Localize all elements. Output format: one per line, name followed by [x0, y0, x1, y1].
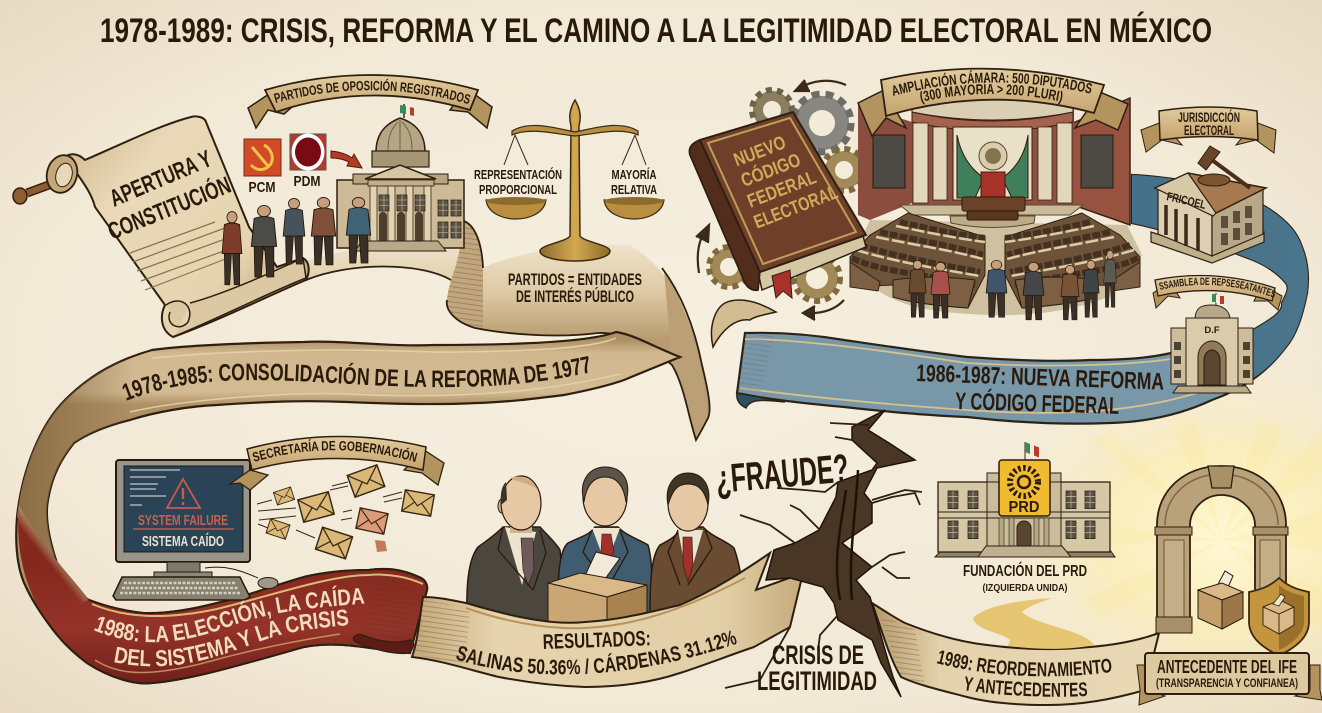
banner: assembly of representatives: [1152, 274, 1283, 311]
icon: PRD founding building: [935, 442, 1115, 557]
book title: NUEVO: [731, 132, 789, 171]
arrow: parties toward congress: [331, 151, 362, 168]
icon: PDM party emblem: [290, 134, 326, 190]
arrows: reform cycle: [696, 80, 846, 320]
scale labels: RELATIVA: [611, 182, 657, 197]
deputies standing: [909, 250, 1116, 320]
ribbon text: 1986-1987: [916, 360, 1165, 420]
ribbon text: 1986-1987: 1986-1987: NUEVA REFORMA: [916, 360, 1165, 396]
icon: gold shield: [1249, 578, 1309, 656]
results text: RESULTADOS:: [542, 627, 651, 654]
ribbon red section: [18, 505, 428, 684]
icon: PCM party emblem: PCM: [248, 179, 276, 196]
ribbon text: 1978-1985: 1978-1985: CONSOLIDACIÓN DE LA REFORMA DE 1977: [122, 356, 588, 400]
text: fraud question: ¿FRAUDE?: [714, 447, 850, 502]
candidate right: [650, 473, 742, 625]
ribbon text: 1989: Y ANTECEDENTES: [965, 676, 1088, 697]
banner: electoral jurisdiction: JURISDICCIÓN: [1178, 110, 1240, 125]
icon: crashed computer: SYSTEM FAILURE: [138, 513, 228, 529]
book title: FEDERAL: [745, 167, 820, 213]
candidate left: [467, 476, 562, 630]
background glow behind the arch: [955, 340, 1322, 713]
icon: scales of justice: [474, 100, 664, 261]
ribbon: 1986-1987 blue band: [737, 175, 1308, 424]
path to the arch: [973, 598, 1094, 649]
ribbon: 1989 reorganisation: [872, 602, 1160, 706]
banner: registered opposition parties: [247, 74, 493, 130]
ribbon text: 1988 election: DEL SISTEMA Y LA CRISIS: [114, 610, 348, 666]
chamber floor: [850, 220, 1142, 315]
gears around code book: [709, 90, 865, 301]
icon: ballot box at arch: [1198, 571, 1243, 629]
ribbon text: 1988 election: 1988: LA ELECCIÓN, LA CAÍDA: [94, 586, 364, 642]
scale labels: PROPORCIONAL: [479, 182, 557, 197]
deputy seats: [850, 213, 1140, 308]
text: legitimacy crisis: LEGITIMIDAD: [757, 666, 877, 696]
icon: D.F. assembly building: [1171, 293, 1253, 393]
national flags and seal: [957, 135, 1028, 198]
scale labels: [474, 167, 657, 197]
note: parties as public-interest entities: [508, 270, 642, 306]
icon: new federal electoral code book: [689, 112, 866, 298]
scroll rod and roll: [13, 152, 81, 204]
ribbon: upper tan band with parties note: [300, 221, 710, 440]
results text: SALINAS 50.36% / CÁRDENAS 31.12%: [456, 630, 737, 675]
scale labels: MAYORÍA: [612, 167, 657, 182]
chamber of deputies hall: [850, 98, 1142, 320]
ribbon text: 1989: [936, 650, 1112, 697]
icon: arch of legitimacy: [1155, 466, 1288, 633]
icon: PCM party emblem: [244, 139, 281, 196]
icon: electoral tribunal with gavel: FRICOEL: [1165, 189, 1207, 212]
legitimacy crack: [725, 410, 922, 697]
icon: PDM party emblem: PDM: [294, 173, 320, 190]
banner: electoral jurisdiction: ELECTORAL: [1184, 123, 1234, 138]
plaque: IFE antecedent: [1137, 653, 1322, 705]
label: PRD foundation: [963, 561, 1087, 594]
banner: chamber expansion: (300 MAYORÍA > 200 PLURI): [920, 81, 1062, 104]
icon: crashed computer: [113, 460, 278, 600]
flying envelopes: [257, 465, 434, 559]
PRD sign: PRD: [1008, 499, 1040, 516]
banner: assembly of representatives: SSAMBLEA DE REPSESEATANTES: [1159, 278, 1276, 298]
label: PRD foundation: FUNDACIÓN DEL PRD: [963, 561, 1087, 580]
banner: chamber expansion: [857, 68, 1129, 138]
scale labels: REPRESENTACIÓN: [474, 167, 562, 182]
ballot box: [548, 552, 647, 625]
book title: [731, 132, 841, 233]
label: PRD foundation: (IZQUIERDA UNIDA): [982, 582, 1068, 594]
scroll heading: [104, 145, 235, 246]
icon: crashed computer: SISTEMA CAÍDO: [142, 533, 224, 550]
text: legitimacy crisis: CRISIS DE: [772, 640, 864, 670]
book title: ELECTORAL: [751, 182, 841, 233]
scroll heading: APERTURA Y: [106, 145, 216, 213]
banner: registered opposition parties: PARTIDOS DE OPOSICIÓN REGISTRADOS: [274, 78, 470, 104]
banner: chamber expansion: AMPLIACIÓN CÁMARA: 500 DIPUTADOS: [893, 70, 1092, 96]
note: parties as public-interest entities: DE INTERÉS PÚBLICO: [516, 287, 634, 306]
scroll heading: CONSTITUCIÓN: [104, 171, 235, 246]
banner: secretaría de gobernación: SECRETARÍA DE GOBERNACIÓN: [252, 439, 418, 462]
people filing to register: [222, 197, 371, 285]
text: legitimacy crisis: [757, 640, 877, 696]
three candidates with ballot box: [467, 467, 742, 630]
icon: constitution scroll: [13, 116, 309, 337]
ribbon text: 1986-1987: Y CÓDIGO FEDERAL: [955, 387, 1120, 420]
fold of red ribbon: [353, 634, 414, 653]
banner: electoral jurisdiction: [1141, 107, 1276, 153]
candidate center: [558, 467, 652, 625]
icon: electoral tribunal with gavel: [1151, 146, 1266, 263]
ribbon curl: blue band tip: [711, 300, 776, 347]
book title: CÓDIGO: [738, 149, 804, 192]
ribbon text: 1989: 1989: REORDENAMIENTO: [936, 650, 1112, 676]
ribbon: election results: [352, 550, 802, 688]
note: parties as public-interest entities: PARTIDOS = ENTIDADES: [508, 270, 642, 289]
icon: congress building: [337, 104, 464, 251]
ribbon: 1978-1985 tan band flowing to red 1988 band: [15, 330, 683, 684]
icon: D.F. assembly building: D.F: [1204, 325, 1220, 336]
PRD sign: [999, 460, 1050, 516]
banner: secretaría de gobernación: [228, 436, 445, 490]
